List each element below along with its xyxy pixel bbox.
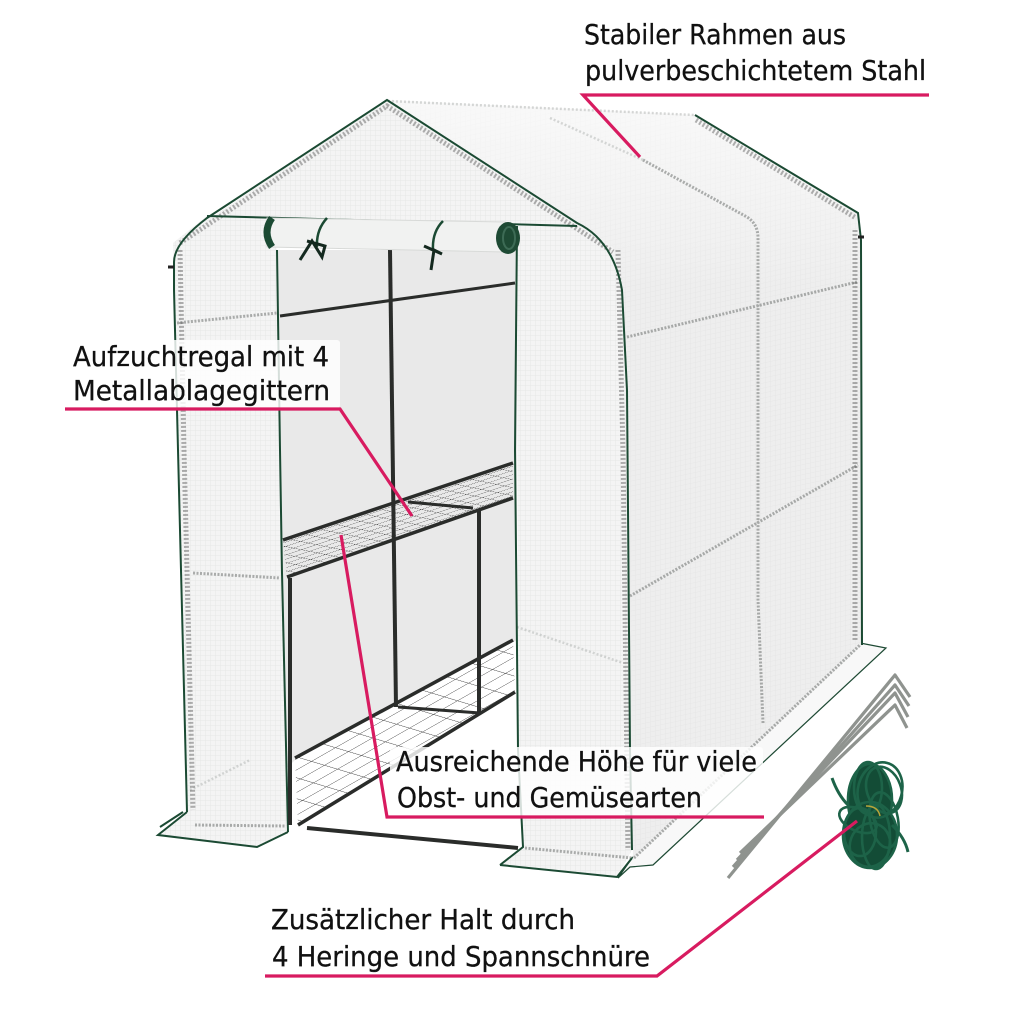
lower shelf grid: [295, 640, 515, 825]
faint fabric folds: [190, 101, 695, 790]
callout: shelves: Metallablagegittern: [73, 374, 330, 407]
callout: pegs and ropes: [265, 821, 857, 976]
callout: frame: pulverbeschichtetem Stahl: [585, 54, 926, 87]
panel: right door flap: [500, 226, 632, 877]
callout: pegs and ropes: 4 Heringe und Spannschnüre: [272, 940, 650, 973]
lower shelf rails: [295, 640, 515, 825]
callout: height: Ausreichende Höhe für viele: [396, 745, 757, 778]
callout: pegs and ropes: Zusätzlicher Halt durch: [271, 903, 575, 936]
panel: roof and side wall: [387, 100, 862, 860]
icon: guy rope bundle: [832, 757, 908, 873]
rack frame: [280, 250, 518, 848]
white label backgrounds: [68, 340, 763, 816]
callout: height: [341, 535, 764, 817]
panel: door opening back wall: [278, 250, 517, 770]
upper shelf rails: [283, 463, 513, 577]
callout: frame: [583, 18, 929, 157]
side clips: [168, 237, 864, 267]
callout: shelves: Aufzuchtregal mit 4: [73, 340, 329, 373]
ground sheet right: [618, 643, 886, 878]
panel: roof highlight: [387, 100, 861, 340]
mesh hem along edges: [180, 106, 856, 850]
fabric seams: [177, 160, 860, 858]
greenhouse: [158, 100, 886, 878]
panel: front gable: [173, 100, 613, 247]
callout: height: Obst- und Gemüsearten: [397, 781, 702, 814]
green edge binding: [158, 100, 862, 877]
callout: frame: Stabiler Rahmen aus: [584, 18, 846, 51]
rolled door: [267, 218, 520, 270]
icon: ground pegs: [728, 675, 910, 878]
callout: shelves: [65, 340, 412, 516]
upper shelf grid: [283, 463, 513, 577]
panel: left front flap: [158, 216, 288, 847]
